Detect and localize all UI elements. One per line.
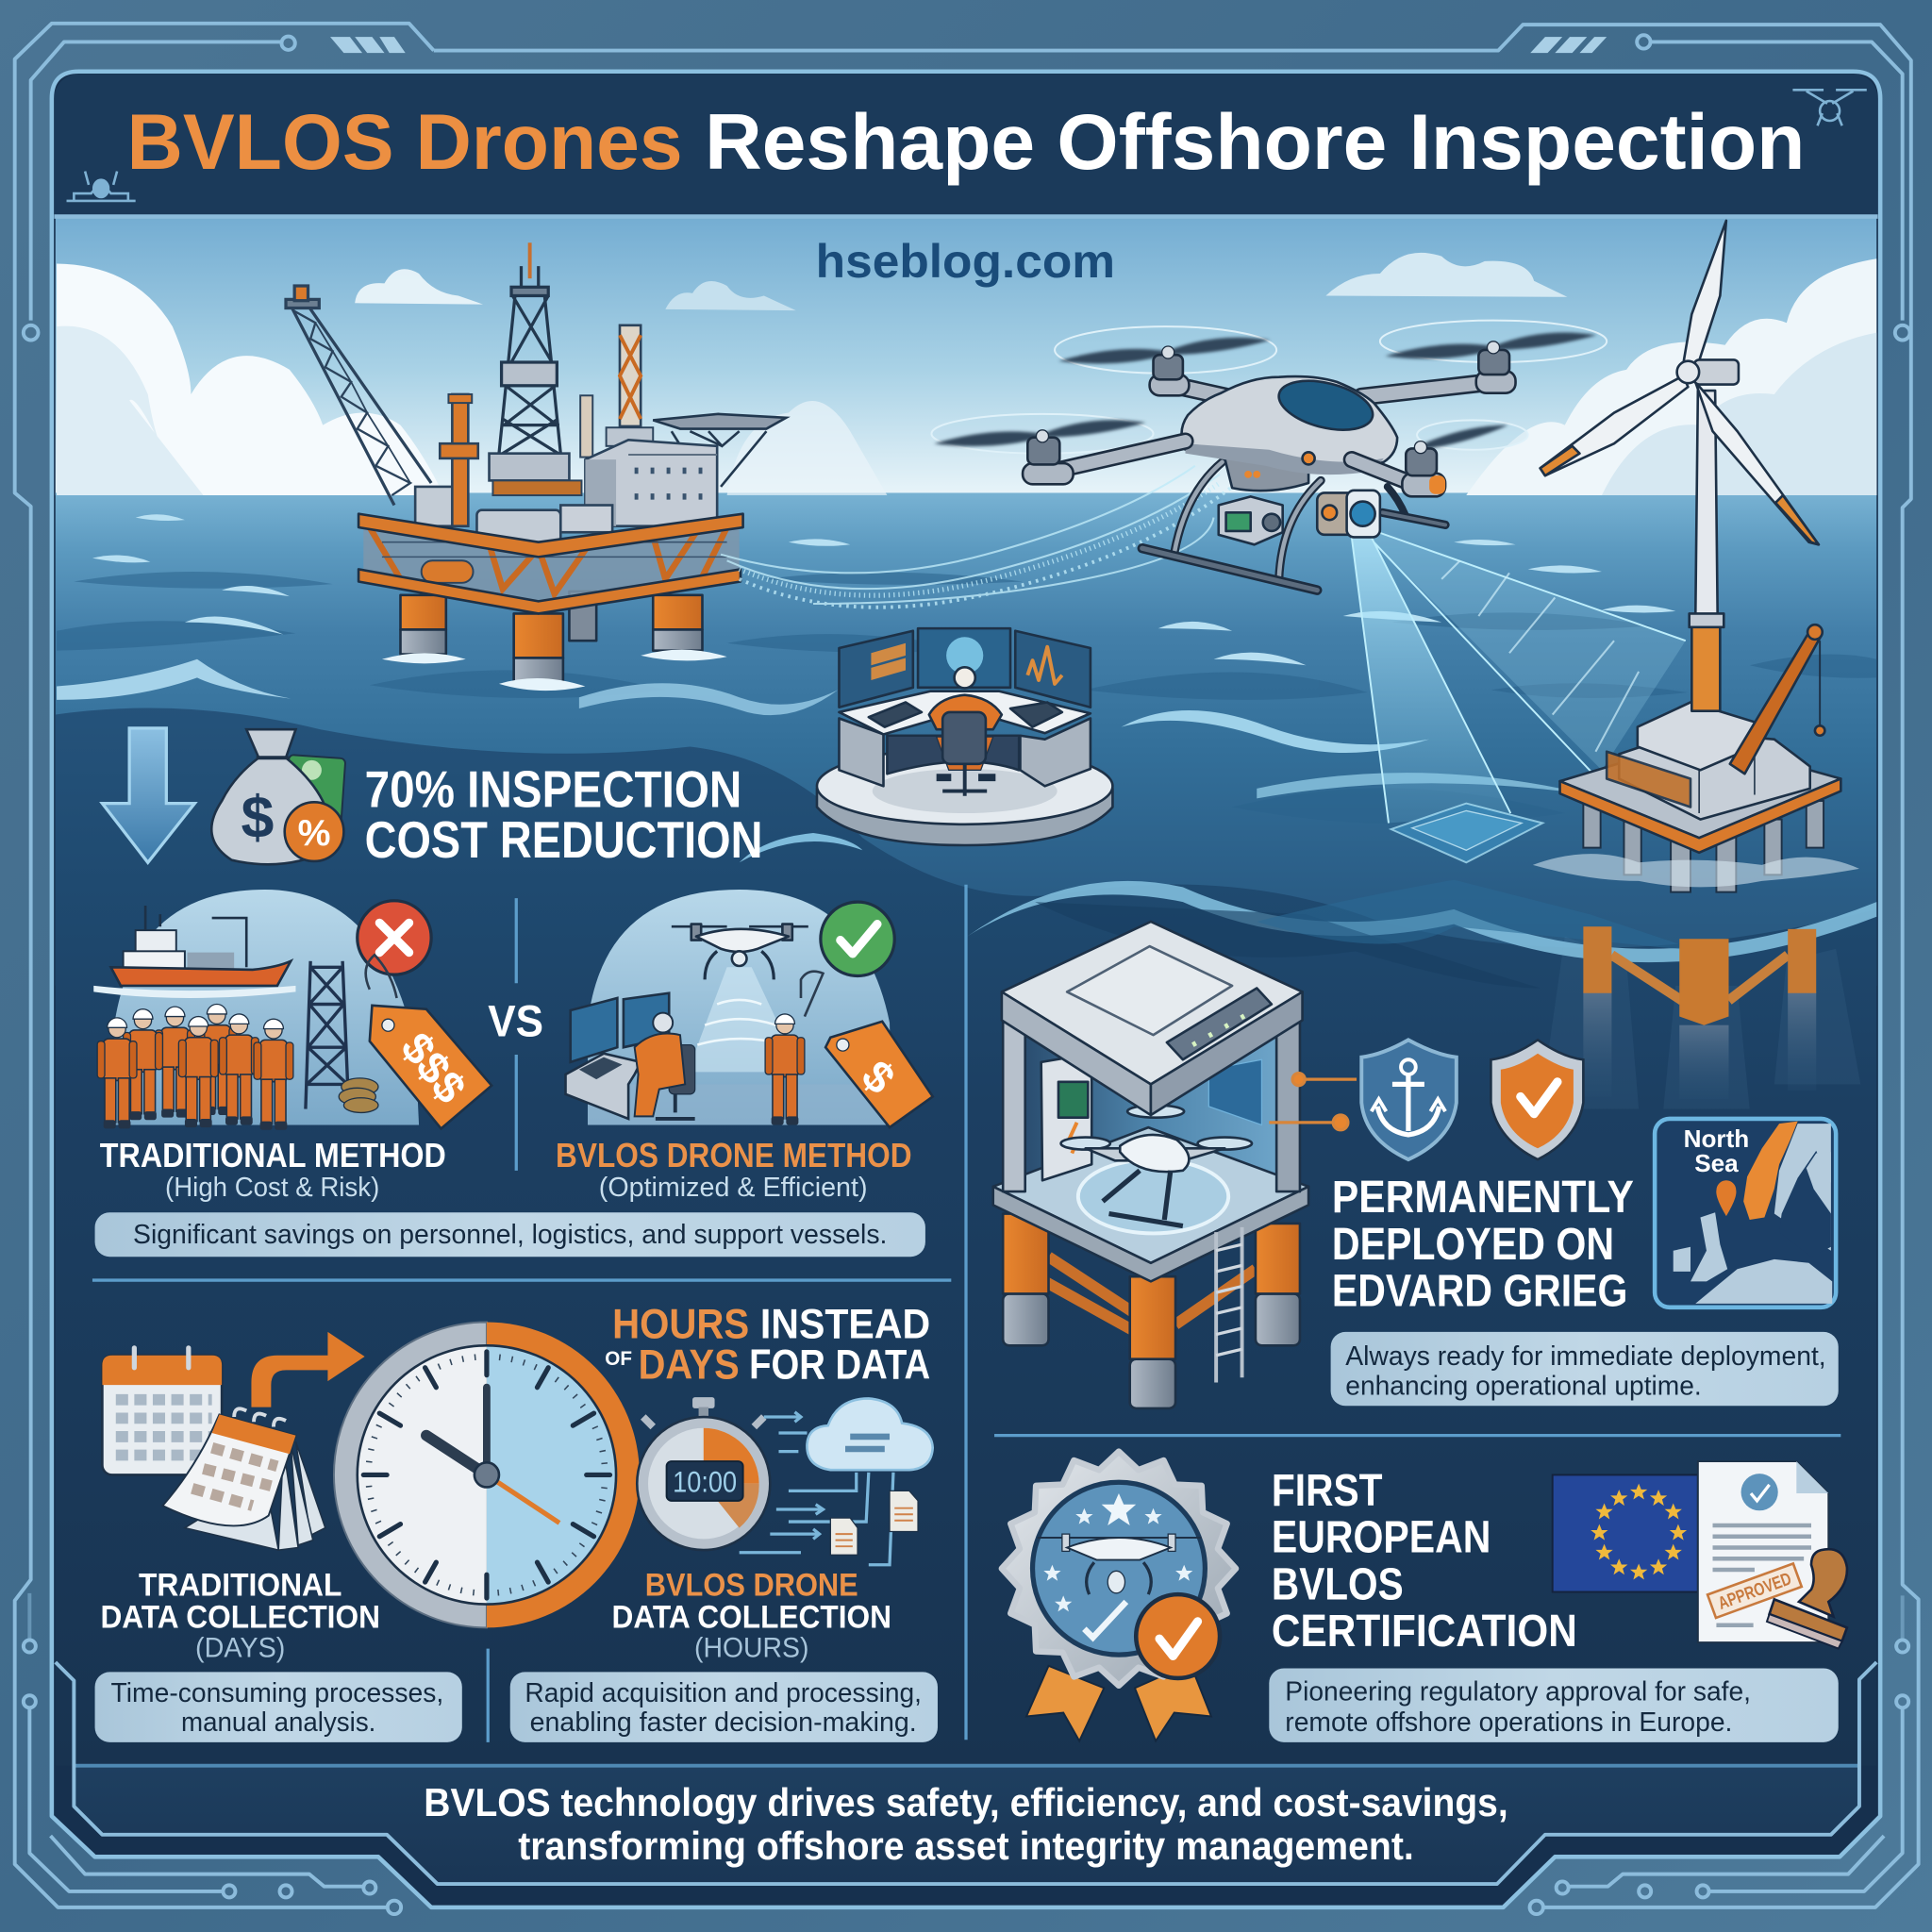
workers group: [97, 1004, 293, 1130]
label: drone method: [556, 1136, 912, 1203]
icon: high price tag: [366, 955, 491, 1128]
icon: wall calendar: [102, 1348, 222, 1474]
summary text: [424, 1780, 1508, 1868]
illustration: drone: [931, 321, 1607, 591]
title: BVLOS Drones: [127, 97, 683, 186]
water foam: [1533, 854, 1859, 887]
callout: time-consuming: Time-consuming processes,: [111, 1678, 443, 1708]
illustration: oil rig: [286, 242, 786, 691]
lower legs: [400, 591, 702, 683]
between decks: [363, 524, 740, 604]
docked drone: [1061, 1106, 1252, 1226]
icon: operator at desk: [566, 993, 695, 1119]
callout: rapid acquisition: Rapid acquisition and processing,: [525, 1678, 922, 1708]
icon: flipping calendar: [162, 1408, 325, 1550]
helideck: [653, 414, 786, 487]
rear skid and landing legs: [1142, 462, 1445, 591]
heading: permanently deployed: [1332, 1172, 1634, 1316]
stat heading: [365, 760, 762, 869]
under body: [1224, 458, 1308, 491]
heading: permanently deployed: PERMANENTLY: [1332, 1172, 1634, 1223]
callout: rapid acquisition: [510, 1672, 938, 1742]
icon: sandbags: [339, 1078, 378, 1112]
icon: certification badge: [1002, 1452, 1236, 1741]
water foam: [382, 650, 727, 691]
icon: high price tag: $$$: [391, 1023, 476, 1112]
section: 70% cost reduction: [102, 728, 762, 869]
data flow arrows: [740, 1412, 893, 1565]
operator: [929, 667, 1002, 796]
callout: pioneering: remote offshore operations in Europe.: [1285, 1707, 1732, 1738]
icon: down arrow: [102, 728, 194, 862]
title: Reshape Offshore Inspection: [705, 97, 1805, 186]
decks: [358, 514, 743, 613]
callout: time-consuming: manual analysis.: [181, 1707, 375, 1738]
stat heading: 70% INSPECTION: [365, 760, 741, 819]
section: hours instead of days: [95, 1301, 938, 1742]
label: traditional method: [100, 1136, 446, 1203]
sky: [56, 217, 1876, 495]
offshore platform: [1560, 702, 1840, 853]
scan signal: [688, 967, 801, 1072]
heading: hours instead of days: FOR DATA: [749, 1342, 930, 1389]
icon: green check badge: [821, 902, 894, 975]
icon: approved document: [1698, 1461, 1847, 1649]
crane: [1730, 625, 1824, 774]
panel: traditional method: [93, 890, 491, 1203]
floor: [993, 1127, 1308, 1281]
label: BVLOS drone data collection: BVLOS DRONE: [645, 1567, 858, 1603]
top lid: [1002, 922, 1303, 1115]
icon: small landing drone: [67, 172, 136, 201]
icon: technician: [765, 972, 823, 1124]
icon: small flying drone: [1792, 90, 1867, 125]
rotors: [931, 321, 1607, 454]
heading: hours instead of days: OF: [605, 1348, 632, 1370]
illustration: wind turbine: [1533, 221, 1860, 1109]
label: drone method: BVLOS DRONE METHOD: [556, 1136, 912, 1174]
desk: [839, 691, 1091, 786]
icon: red cross badge: [358, 901, 431, 974]
stat heading: COST REDUCTION: [365, 810, 762, 869]
clouds: [57, 253, 1876, 495]
label: BVLOS drone data collection: [611, 1567, 891, 1664]
label: traditional data collection: TRADITIONAL: [139, 1567, 341, 1603]
callout: pioneering: Pioneering regulatory approval for safe,: [1285, 1676, 1751, 1707]
icon: money bag: [211, 729, 345, 864]
panel: BVLOS drone method: [556, 890, 933, 1203]
accommodation block: [585, 427, 717, 526]
icon: documents: [830, 1491, 918, 1555]
cameras: [1219, 491, 1380, 544]
map label: North: [1684, 1124, 1749, 1153]
platform legs: [1583, 801, 1824, 892]
icon: orange arrow: [251, 1332, 365, 1407]
tower and blades: [1541, 221, 1819, 711]
illustration: control station: [817, 628, 1112, 845]
map label: Sea: [1694, 1149, 1739, 1177]
map label: [1684, 1124, 1749, 1177]
icon: money bag: $: [242, 785, 274, 851]
legs: [1003, 1214, 1300, 1408]
monitors: [839, 628, 1091, 708]
heading: hours instead of days: HOURS: [612, 1301, 749, 1347]
heading: hours instead of days: [605, 1301, 930, 1389]
map pin: [1716, 1180, 1736, 1216]
callout: savings: [95, 1212, 925, 1257]
heading: hours instead of days: INSTEAD: [760, 1301, 930, 1347]
icon: small drone: [672, 924, 808, 979]
map: North Sea: [1655, 1119, 1836, 1307]
icon: large split clock: [334, 1322, 640, 1627]
website label: hseblog.com: [816, 235, 1115, 288]
icon: approved document: APPROVED: [1716, 1569, 1794, 1614]
derrick: [499, 242, 560, 454]
icon: low price tag: [825, 1022, 933, 1127]
flare stack: [580, 325, 641, 458]
icon: orange check shield: [1491, 1040, 1583, 1159]
scene dome: [588, 890, 892, 1124]
label: BVLOS drone data collection: (HOURS): [694, 1633, 808, 1664]
label: traditional data collection: (DAYS): [195, 1633, 285, 1664]
label: traditional method: TRADITIONAL METHOD: [100, 1136, 446, 1174]
scene dome: [114, 890, 419, 1124]
section: permanently deployed: [993, 922, 1839, 1408]
illustration: scan beams: [1352, 530, 1686, 862]
section dividers: [92, 885, 1840, 1742]
ladder: [1216, 1227, 1242, 1382]
label: BVLOS drone data collection: DATA COLLECTION: [611, 1599, 891, 1635]
underwater jacket: [1541, 926, 1860, 1109]
icon: EU flag: [1553, 1474, 1698, 1592]
charging cabinet: [1041, 1054, 1091, 1180]
front arms: [1023, 430, 1445, 496]
title: [127, 97, 1805, 186]
body: [1181, 373, 1397, 478]
callout: always ready: Always ready for immediate deployment,: [1345, 1341, 1826, 1372]
heading: certification: [1272, 1465, 1577, 1657]
summary text: transforming offshore asset integrity management.: [518, 1824, 1414, 1868]
wall screen: [1208, 1059, 1261, 1124]
icon: ship: [93, 906, 295, 998]
icon: money bag: %: [298, 813, 330, 854]
heading bar: [54, 74, 1878, 219]
icon: lattice tower: [306, 961, 349, 1109]
callout: time-consuming: [95, 1672, 462, 1742]
label: traditional method: (High Cost & Risk): [165, 1173, 379, 1203]
connector lines: [1269, 1074, 1357, 1130]
heading: hours instead of days: DAYS: [639, 1342, 740, 1389]
frame pillars: [1003, 1001, 1300, 1191]
icon: cloud upload: [807, 1398, 933, 1470]
icon: stopwatch: 10:00: [673, 1466, 737, 1499]
platform: [817, 748, 1112, 845]
machinery modules: [415, 394, 612, 542]
illustration: drone hangar: [993, 922, 1308, 1408]
chamber back: [1018, 1023, 1287, 1189]
crane boom: [286, 286, 431, 506]
icon: anchor shield: [1361, 1040, 1457, 1159]
label: traditional data collection: [100, 1567, 380, 1664]
callout: always ready: enhancing operational uptime.: [1345, 1372, 1702, 1402]
rear arms: [1150, 341, 1516, 397]
callout: rapid acquisition: enabling faster decision-making.: [530, 1707, 917, 1738]
sea: [56, 492, 1876, 986]
heading: certification: CERTIFICATION: [1272, 1606, 1577, 1657]
heading: certification: EUROPEAN: [1272, 1512, 1491, 1563]
big wave crests: [740, 833, 1876, 989]
summary text: BVLOS technology drives safety, efficiency, and cost-savings,: [424, 1780, 1508, 1824]
vs divider: VS: [488, 995, 543, 1045]
label: drone method: (Optimized & Efficient): [599, 1173, 868, 1203]
icon: stopwatch: [637, 1397, 770, 1550]
callout: savings: Significant savings on personnel, logistics, and support vessels.: [133, 1220, 887, 1250]
callout: always ready: [1331, 1332, 1839, 1406]
label: traditional data collection: DATA COLLECTION: [100, 1599, 380, 1635]
heading: certification: FIRST: [1272, 1465, 1382, 1516]
heading: permanently deployed: DEPLOYED ON: [1332, 1219, 1614, 1270]
heading: permanently deployed: EDVARD GRIEG: [1332, 1265, 1627, 1316]
data stream: [721, 466, 1232, 608]
footer band: [56, 1662, 1876, 1884]
deep water and lower background: [56, 708, 1876, 1766]
icon: low price tag: $: [852, 1050, 905, 1103]
sea wave texture: [57, 514, 1876, 824]
callout: pioneering: [1269, 1668, 1839, 1742]
heading: certification: BVLOS: [1272, 1558, 1404, 1609]
section: first European certification: [1002, 1452, 1847, 1742]
